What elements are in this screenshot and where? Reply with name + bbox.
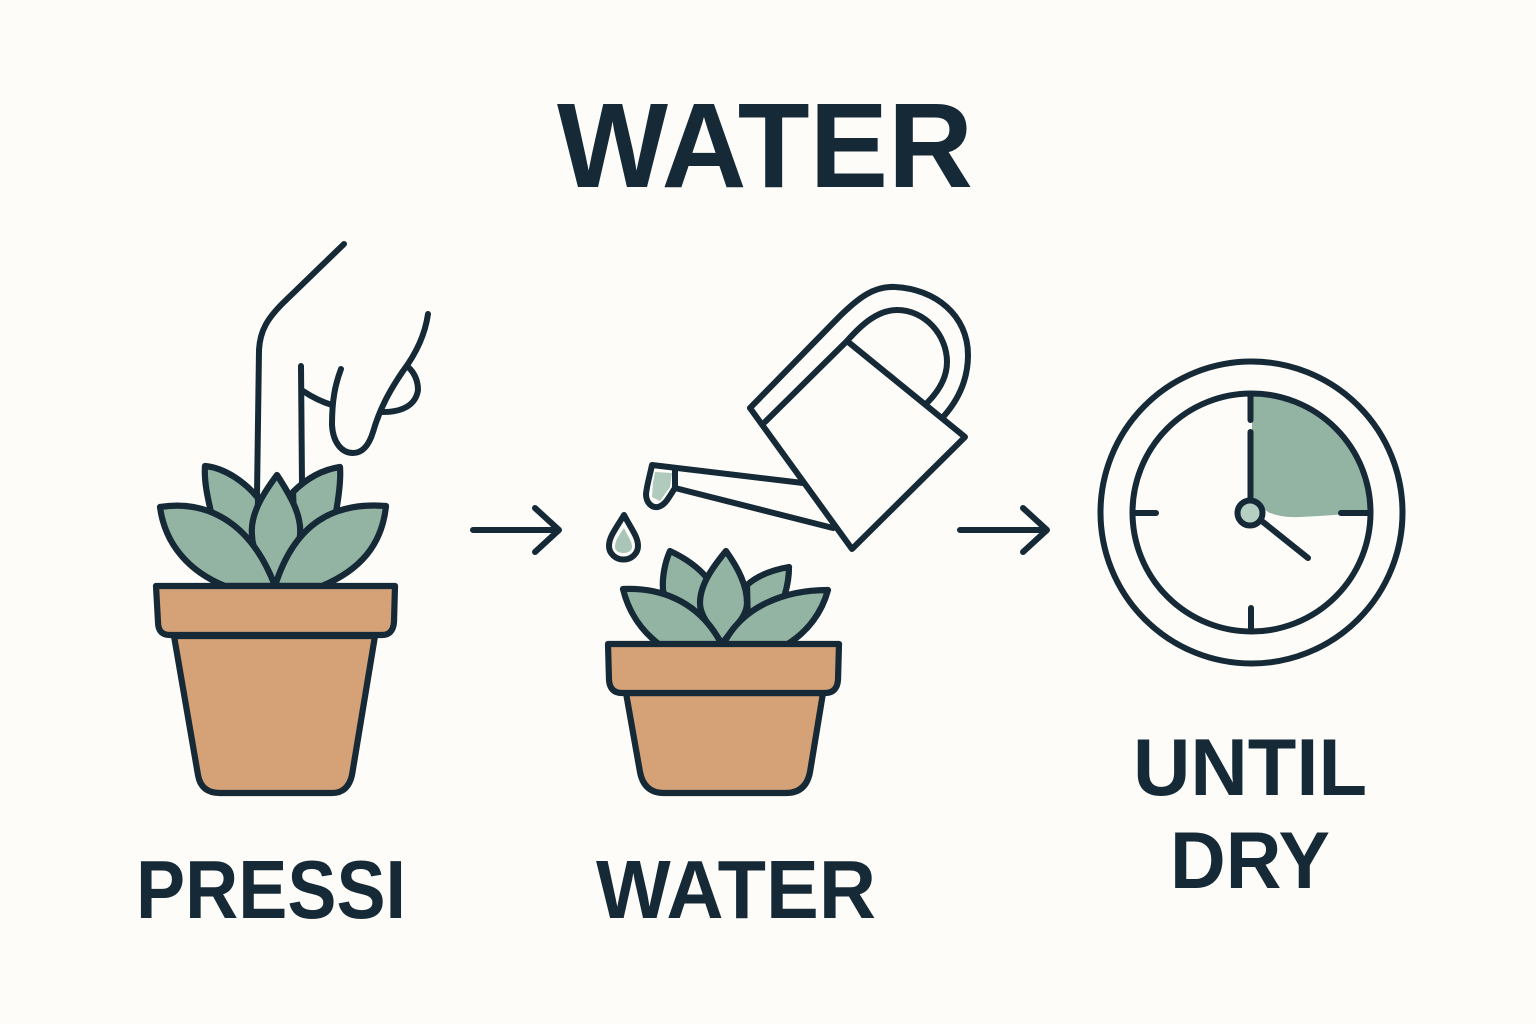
arrow: second (960, 508, 1047, 552)
label: until dry: DRY (1170, 816, 1330, 906)
icon: clock (1100, 362, 1402, 664)
icon: hand pressing soil (257, 244, 428, 495)
centre leaf (252, 475, 300, 586)
arrow: first (473, 508, 559, 552)
title: WATER (557, 77, 973, 213)
pot body (174, 636, 375, 793)
icon: water drop (609, 515, 638, 560)
icon: plant in pot, centre (608, 551, 839, 793)
back leaves (663, 551, 707, 630)
pot rim (156, 586, 395, 635)
pot rim (608, 644, 839, 693)
label: until dry (1133, 723, 1367, 906)
elapsed time wedge (1252, 396, 1368, 517)
pot body (626, 693, 823, 793)
label: water: WATER (596, 843, 876, 936)
label: pressi: PRESSI (136, 843, 406, 936)
icon: watering can (646, 287, 968, 549)
side leaves (160, 506, 275, 586)
back leaves (205, 466, 258, 550)
side leaves (623, 589, 722, 645)
icon: plant in pot, left (156, 466, 395, 793)
label: until dry: UNTIL (1133, 723, 1367, 813)
centre leaf (700, 551, 747, 644)
